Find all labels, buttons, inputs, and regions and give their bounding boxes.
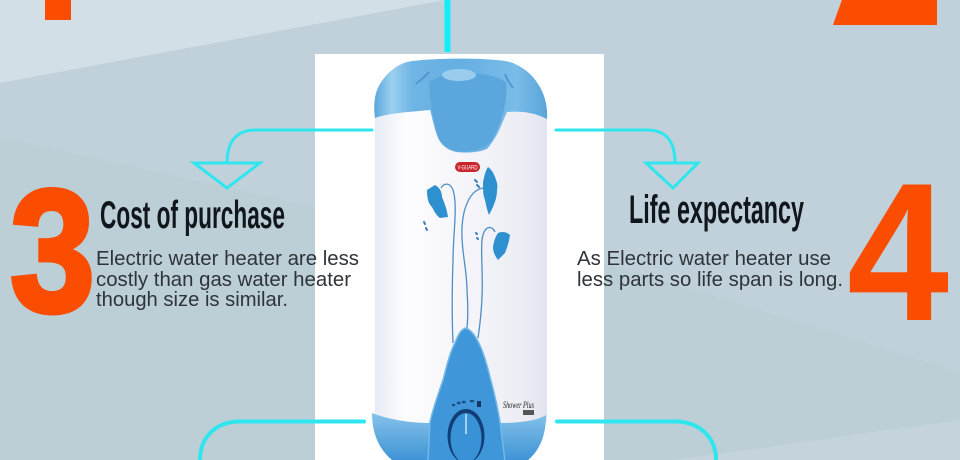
model label: Shower Plus <box>503 400 534 410</box>
text: cost description: Electric water heater are less <box>96 248 359 270</box>
bottom right connector <box>557 422 716 460</box>
top connector <box>444 0 450 52</box>
heater cap centre <box>429 73 506 152</box>
temperature dial <box>448 409 484 460</box>
heater top cap <box>374 59 547 153</box>
water heater image <box>372 59 547 460</box>
text: cost description: costly than gas water heater <box>96 269 351 291</box>
cap notches <box>416 72 513 88</box>
brand badge: V-GUARD <box>458 166 478 172</box>
text: cost description <box>96 248 359 311</box>
model label <box>503 400 534 415</box>
text: cost description: though size is similar. <box>96 289 288 311</box>
bottom left connector <box>200 422 364 460</box>
highlight <box>442 69 476 81</box>
number 3: 3 <box>10 154 95 348</box>
connector to cost of purchase <box>194 130 372 188</box>
number 2 <box>833 0 937 25</box>
text: life description <box>577 248 843 291</box>
control panel <box>428 328 505 460</box>
connector to life expectancy <box>556 130 698 188</box>
heater base <box>372 413 546 460</box>
number 1 <box>45 0 71 20</box>
heading: cost of purchase: Cost of purchase <box>100 194 285 237</box>
text: life description: less parts so life span is long. <box>577 269 843 291</box>
white product panel <box>315 54 604 460</box>
number 4: 4 <box>847 143 949 362</box>
flower decoration <box>424 167 510 343</box>
indicator dots <box>453 401 473 405</box>
text: life description: As Electric water heater use <box>577 248 831 270</box>
heading: life expectancy: Life expectancy <box>629 188 804 232</box>
brand badge <box>455 162 480 172</box>
heater body <box>375 112 547 422</box>
